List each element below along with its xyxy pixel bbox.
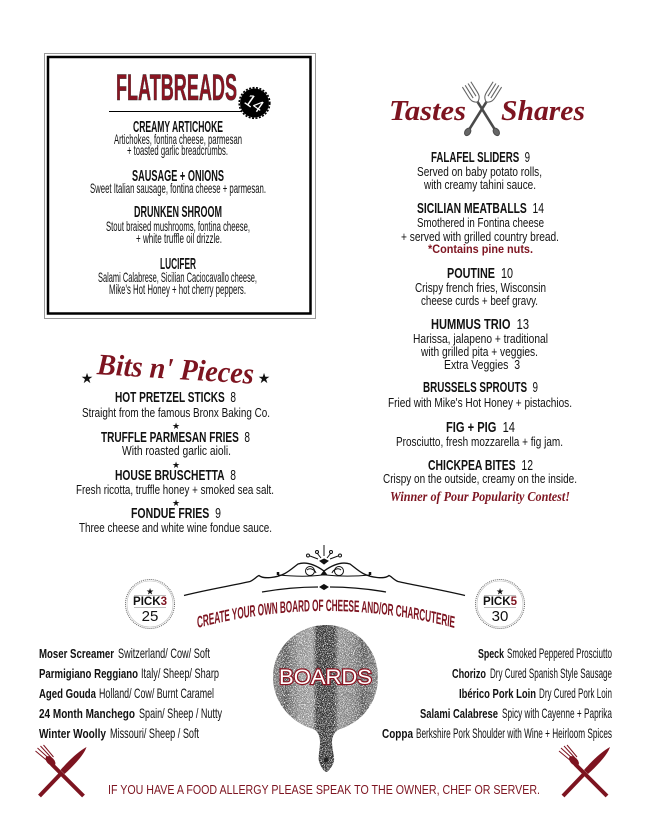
item: poutine: POUTINE 10	[447, 265, 513, 282]
icon: right fork and knife	[559, 745, 610, 796]
list: cheeses: Spain/ Sheep / Nutty	[139, 705, 222, 721]
item: falafel sliders: with creamy tahini sauce.	[423, 177, 536, 192]
item: falafel sliders	[417, 149, 542, 192]
icon: right star: ★	[258, 371, 270, 387]
item: drunken shroom: Stout braised mushrooms, fontina cheese,	[106, 218, 250, 234]
item: drunken shroom: + white truffle oil drizzle.	[136, 230, 222, 246]
item: drunken shroom: DRUNKEN SHROOM	[134, 204, 222, 221]
badge: pick 3: ★	[146, 588, 154, 598]
item: sicilian meatballs: SICILIAN MEATBALLS 14	[417, 200, 544, 217]
item: sicilian meatballs: + served with grilled country bread.	[401, 229, 559, 244]
item: fondue fries: FONDUE FRIES 9	[131, 505, 221, 522]
badge: pick 3: 25	[142, 608, 158, 625]
list: cheeses: Winter Woolly	[39, 726, 107, 741]
list: charcuterie: Ibérico Pork Loin	[459, 686, 536, 701]
item: brussels sprouts: Fried with Mike's Hot Honey + pistachios.	[388, 395, 572, 410]
item: falafel sliders: FALAFEL SLIDERS 9	[431, 149, 530, 166]
icon: crossed forks	[461, 82, 503, 138]
item: poutine: cheese curds + beef gravy.	[421, 293, 538, 308]
panel: flatbreads: FLATBREADS	[116, 66, 237, 108]
item: creamy artichoke: CREAMY ARTICHOKE	[133, 119, 223, 136]
list: charcuterie: Coppa	[382, 726, 414, 741]
item: sicilian meatballs: Smothered in Fontina cheese	[417, 215, 544, 230]
badge: pick 3	[126, 580, 174, 628]
item: hummus trio: with grilled pita + veggies.	[420, 344, 538, 359]
icon: star divider: ★	[172, 499, 180, 509]
list: charcuterie: Speck	[478, 646, 505, 661]
icon: star divider: ★	[172, 422, 180, 432]
badge: pick 5: ★	[496, 588, 504, 598]
panel: flatbreads	[44, 54, 316, 318]
price badge: 14: 14	[241, 90, 267, 117]
list: cheeses: Parmigiano Reggiano	[39, 666, 138, 681]
item: falafel sliders: Served on baby potato rolls,	[417, 164, 542, 179]
item: sausage + onions	[90, 168, 266, 196]
item: house bruschetta: Fresh ricotta, truffle honey + smoked sea salt.	[76, 482, 274, 497]
item: fig + pig: FIG + PIG 14	[446, 419, 515, 436]
item: sausage + onions: Sweet Italian sausage, fontina cheese + parmesan.	[90, 180, 266, 196]
item: lucifer: Mike's Hot Honey + hot cherry peppers.	[109, 281, 246, 297]
badge: pick 5: 30	[492, 608, 508, 625]
item: house bruschetta	[76, 467, 274, 497]
item: poutine	[415, 265, 546, 308]
list: cheeses: Holland/ Cow/ Burnt Caramel	[99, 685, 214, 701]
item: hummus trio: Extra Veggies 3	[444, 357, 520, 372]
list: cheeses	[39, 645, 222, 741]
note: food allergy: IF YOU HAVE A FOOD ALLERGY PLEASE SPEAK TO THE OWNER, CHEF OR SERVER.	[108, 783, 540, 797]
heading: tastes + shares: Tastes	[389, 95, 466, 127]
item: chickpea bites: Crispy on the outside, creamy on the inside.	[383, 471, 577, 486]
item: truffle parmesan fries: With roasted garlic aioli.	[122, 443, 231, 458]
item: hot pretzel sticks: HOT PRETZEL STICKS 8	[115, 389, 236, 406]
list: charcuterie: Salami Calabrese	[420, 706, 498, 721]
item: poutine: Crispy french fries, Wisconsin	[415, 280, 546, 295]
ornament: boards flourish	[184, 545, 465, 596]
item: fig + pig: Prosciutto, fresh mozzarella + fig jam.	[396, 434, 563, 449]
item: hot pretzel sticks	[82, 389, 270, 420]
list: cheeses: Italy/ Sheep/ Sharp	[141, 665, 219, 681]
item: hummus trio	[413, 316, 548, 372]
list: tastes and shares items	[383, 149, 577, 504]
item: truffle parmesan fries	[101, 429, 250, 458]
heading underline	[109, 110, 241, 112]
list: cheeses: Aged Gouda	[39, 686, 97, 701]
item: fondue fries	[79, 505, 272, 535]
item: sicilian meatballs: *Contains pine nuts.	[428, 242, 533, 256]
item: hot pretzel sticks: Straight from the famous Bronx Baking Co.	[82, 405, 270, 420]
heading: tastes + shares	[389, 95, 585, 127]
item: brussels sprouts: BRUSSELS SPROUTS 9	[423, 379, 538, 396]
board label: BOARDS	[279, 666, 372, 689]
icon: left star: ★	[81, 371, 93, 387]
list: cheeses: 24 Month Manchego	[39, 706, 135, 721]
list: cheeses: Moser Screamer	[39, 646, 114, 661]
item: chickpea bites	[383, 457, 577, 486]
list: charcuterie	[382, 645, 612, 741]
item: fondue fries: Three cheese and white wine fondue sauce.	[79, 520, 272, 535]
heading: tastes + shares: Shares	[501, 95, 585, 127]
icon: star divider: ★	[172, 461, 180, 471]
list: cheeses: Switzerland/ Cow/ Soft	[118, 645, 210, 661]
item: lucifer: Salami Calabrese, Sicilian Caciocavallo cheese,	[98, 269, 257, 285]
item: creamy artichoke: Artichokes, fontina cheese, parmesan	[114, 131, 242, 147]
list: charcuterie: Chorizo	[452, 666, 486, 681]
item: creamy artichoke: + toasted garlic breadcrumbs.	[127, 142, 228, 158]
badge: pick 3: PICK3	[133, 594, 167, 608]
icon: wooden board	[273, 625, 378, 773]
item: sausage + onions: SAUSAGE + ONIONS	[132, 168, 224, 185]
item: chickpea bites: CHICKPEA BITES 12	[428, 457, 533, 474]
item: drunken shroom	[106, 204, 250, 246]
heading: bits n' pieces: Bits n' Pieces	[95, 348, 255, 391]
item: fig + pig	[396, 419, 563, 449]
item: hummus trio: Harissa, jalapeno + traditional	[413, 331, 548, 346]
item: hummus trio: HUMMUS TRIO 13	[431, 316, 529, 333]
item: truffle parmesan fries: TRUFFLE PARMESAN FRIES 8	[101, 429, 250, 446]
badge: pick 5: PICK5	[483, 594, 517, 608]
callout: winner: Winner of Pour Popularity Contest!	[390, 489, 570, 504]
item: lucifer: LUCIFER	[160, 256, 196, 273]
item: brussels sprouts	[388, 379, 572, 410]
item: lucifer	[98, 256, 257, 297]
list: cheeses: Missouri/ Sheep / Soft	[110, 725, 199, 741]
item: creamy artichoke	[114, 119, 242, 158]
icon: left fork and knife	[36, 745, 86, 796]
item: sicilian meatballs	[401, 200, 559, 256]
badge: pick 5	[476, 580, 524, 628]
item: house bruschetta: HOUSE BRUSCHETTA 8	[115, 467, 236, 484]
list: bits n' pieces items	[76, 389, 274, 535]
curved heading: create your own board: CREATE YOUR OWN BOARD OF CHEESE AND/OR CHARCUTERIE	[197, 600, 455, 628]
